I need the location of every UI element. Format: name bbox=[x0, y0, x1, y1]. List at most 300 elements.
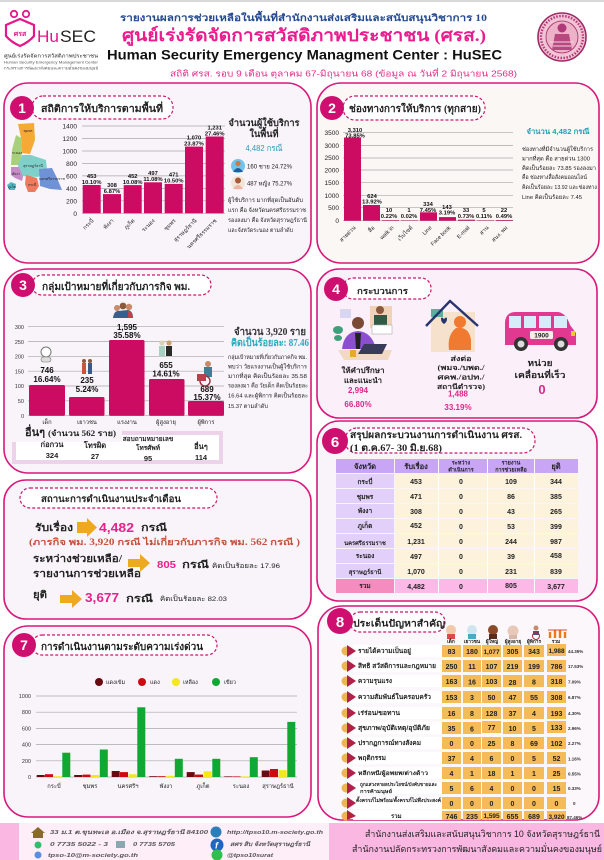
summary table: 0 bbox=[459, 539, 463, 546]
bar chart: target groups: 14.61% bbox=[152, 370, 180, 378]
grouped bar chart: ภูเก็ต bbox=[196, 781, 210, 790]
issue data grid: 0 bbox=[450, 801, 454, 808]
grouped bar chart: กระบี่ bbox=[47, 782, 61, 790]
target group summary text: 16.64 และผู้พิการ คิดเป็นร้อยละ bbox=[228, 390, 308, 400]
summary table: รายงาน bbox=[502, 460, 521, 466]
summary table: ดำเนินการ bbox=[448, 466, 474, 474]
in-progress cases: กรณี bbox=[182, 559, 210, 571]
total service users: ในพื้นที่ bbox=[250, 126, 278, 140]
received cases: 4,482 bbox=[99, 520, 134, 535]
issue data grid: 0 bbox=[490, 801, 494, 808]
issue data grid: 8 bbox=[511, 741, 515, 748]
bar chart: target groups: เด็ก bbox=[42, 417, 52, 426]
received cases bbox=[35, 518, 168, 537]
issue data grid: 4 bbox=[470, 756, 474, 763]
bar chart: cases by province: 471 bbox=[169, 172, 179, 178]
bar chart: channels: walk in bbox=[379, 225, 395, 242]
bar chart: target groups: เยาวชน bbox=[77, 419, 97, 426]
channel summary text: มากที่สุด คือ สายด่วน 1300 bbox=[522, 154, 590, 162]
others table: 27 bbox=[91, 452, 99, 461]
others table: ก่อกวน bbox=[41, 440, 64, 449]
bar chart: cases by province: 1200 bbox=[63, 136, 77, 143]
summary table: ระหว่าง bbox=[452, 460, 471, 466]
heading 6 bbox=[322, 428, 535, 454]
grouped bar chart: สุราษฎร์ธานี bbox=[262, 782, 294, 790]
issue labels: สิทธิ สวัสดิการและกฎหมาย bbox=[358, 662, 436, 670]
issue data grid: 343 bbox=[528, 649, 540, 656]
grouped bar chart: นครศรีฯ bbox=[117, 783, 139, 790]
right total: จำนวน 3,920 ราย bbox=[234, 326, 306, 338]
footer contact details: f bbox=[215, 840, 219, 850]
heading 6: (1 ต.ค.67- 30 มิ.ย.68) bbox=[350, 443, 442, 454]
closed cases: ยุติ bbox=[33, 589, 47, 601]
process: mobile unit: เคลื่อนที่เร็ว bbox=[514, 368, 566, 380]
bar chart: channels: 1500 bbox=[325, 180, 339, 187]
bar chart: channels: สาน bbox=[478, 224, 491, 237]
logo: HuSEC: กระทรวงการพัฒนาสังคมและความมั่นคงของมนุษย์ bbox=[4, 66, 98, 72]
channel summary text bbox=[522, 145, 597, 201]
bar chart: channels: Line bbox=[422, 225, 433, 237]
bar chart: target groups: 50 bbox=[18, 399, 24, 405]
map of provinces: สุราษฎร์ธานี bbox=[23, 163, 43, 169]
heading 7: การดำเนินงานตามระดับความเร่งด่วน bbox=[41, 641, 203, 653]
panel 1: service statistics by area bbox=[4, 83, 311, 263]
summary text: ผู้ใช้บริการ มากที่สุดเป็นอันดับ bbox=[228, 195, 303, 204]
issue percentages bbox=[567, 649, 583, 820]
heading 2: ช่องทางการให้บริการ (ทุกสาย) bbox=[349, 102, 481, 115]
bar chart: target groups: 746 bbox=[40, 366, 54, 375]
channel summary text: ช่องทางที่มีจำนวนผู้ใช้บริการ bbox=[522, 145, 593, 153]
summary table: ระนอง bbox=[356, 553, 374, 560]
issue data grid: 786 bbox=[551, 664, 562, 671]
issue data grid: 128 bbox=[486, 711, 497, 718]
bar chart: channels: 13.92% bbox=[362, 200, 382, 206]
bar chart: channels: 624 bbox=[367, 194, 378, 200]
illustration: mobile unit van bbox=[505, 312, 576, 351]
issue data grid: 25 bbox=[488, 741, 495, 748]
in-progress cases: คิดเป็นร้อยละ 17.96 bbox=[212, 561, 280, 570]
summary table: จังหวัด bbox=[354, 462, 376, 471]
summary table: 53 bbox=[507, 524, 515, 531]
issue data grid: 6 bbox=[490, 756, 494, 763]
footer contact details bbox=[31, 826, 324, 860]
issue data grid: 16 bbox=[468, 680, 476, 686]
issue data grid: 4 bbox=[450, 771, 454, 778]
bar chart: cases by province: 308 bbox=[107, 183, 118, 189]
bar chart: target groups: 1,595 bbox=[117, 323, 138, 332]
grouped bar chart: 400 bbox=[22, 742, 31, 748]
bar chart: target groups: ผู้สูงอายุ bbox=[156, 419, 176, 426]
summary table: 308 bbox=[410, 509, 422, 516]
bar chart: cases by province: 1000 bbox=[63, 148, 77, 156]
panel 7: urgency levels bbox=[4, 626, 311, 817]
footer organisation names bbox=[352, 828, 602, 855]
target group summary text: รองลงมา คือ วัยเด็ก คิดเป็นร้อยละ bbox=[228, 380, 308, 390]
bar chart: cases by province: 10.50% bbox=[164, 178, 184, 184]
icon and count: male: 160 ชาย 24.72% bbox=[247, 164, 293, 170]
footer contact details: สศร สิบ จังหวัดสุราษฎร์ธานี bbox=[230, 840, 311, 848]
heading 8 bbox=[327, 608, 445, 634]
bar chart: channels: 5 bbox=[482, 208, 486, 214]
closed cases bbox=[33, 589, 227, 608]
issue percentages: 87.46% bbox=[567, 815, 582, 820]
issue data grid: 163 bbox=[446, 679, 457, 686]
map of provinces bbox=[7, 123, 65, 192]
process: counselling: และแนะนำ bbox=[344, 376, 382, 385]
right total: คิดเป็นร้อยละ: 87.46 bbox=[231, 335, 309, 349]
logo: HuSEC: SEC bbox=[60, 27, 96, 46]
issue data grid: 5 bbox=[532, 726, 536, 733]
issue data grid: 0 bbox=[470, 801, 474, 808]
in-progress cases: รายงานการช่วยเหลือ bbox=[33, 568, 141, 580]
bar chart: channels: 0.11% bbox=[476, 214, 492, 220]
issue data grid: 35 bbox=[448, 726, 455, 733]
summary table: พังงา bbox=[358, 507, 372, 515]
heading 3: 3 bbox=[19, 277, 27, 293]
issue data grid: 107 bbox=[486, 664, 497, 671]
icon: person in wheelchair bbox=[197, 361, 212, 386]
summary table: 231 bbox=[505, 569, 517, 576]
arrow bullets bbox=[342, 645, 356, 820]
summary table: 0 bbox=[459, 569, 463, 576]
issue data grid: 235 bbox=[466, 814, 478, 821]
map of provinces: ภูเก็ต bbox=[8, 183, 17, 189]
bar chart: cases by province: 452 bbox=[128, 174, 138, 180]
map of provinces: พังงา bbox=[12, 172, 20, 176]
bar chart: channels: 1 bbox=[407, 208, 411, 214]
map of provinces: นครศรีธรรมราช bbox=[39, 176, 65, 181]
issue percentages: 17.53% bbox=[568, 664, 583, 669]
bar chart: channels: 3,310 bbox=[348, 128, 362, 134]
issue data grid: 199 bbox=[528, 664, 540, 671]
bar chart: target groups: 5.24% bbox=[76, 385, 98, 394]
bar chart: channels: 0.73% bbox=[458, 214, 474, 220]
footer contact details: tpso-10@m-society.go.th bbox=[48, 853, 139, 859]
issue data grid: 193 bbox=[551, 711, 562, 718]
bar chart: channels: 3000 bbox=[325, 143, 339, 150]
panel 8: key issues bbox=[318, 606, 599, 821]
issue data grid: 0 bbox=[511, 786, 515, 793]
heading 6: 6 bbox=[331, 434, 339, 451]
bar chart: target groups: 300 bbox=[15, 325, 24, 331]
others table: อื่นๆ bbox=[25, 424, 45, 439]
bar chart: target groups: แรงงาน bbox=[117, 419, 137, 426]
summary table: ชุมพร bbox=[357, 494, 374, 501]
icon: youth bbox=[82, 359, 92, 374]
status heading: สถานะการดำเนินงานประจำเดือน bbox=[41, 493, 182, 505]
process: referral: 33.19% bbox=[444, 403, 472, 412]
bar chart: channels: 33 bbox=[463, 208, 470, 214]
issue data grid: 5 bbox=[532, 756, 536, 763]
panel 4: process bbox=[317, 269, 597, 418]
bar chart: cases by province: 0 bbox=[73, 211, 77, 218]
icon: working-age people bbox=[113, 303, 133, 318]
issue data grid: 0 bbox=[532, 786, 536, 793]
total service users bbox=[228, 117, 300, 153]
in-progress cases bbox=[33, 553, 280, 580]
issue data grid: 6 bbox=[470, 786, 474, 793]
footer contact details: @tpso10surat bbox=[227, 853, 274, 859]
grouped bar chart: 800 bbox=[22, 710, 31, 716]
bar chart: channels: 2500 bbox=[325, 155, 339, 162]
others table: อื่นๆ bbox=[194, 440, 208, 451]
summary table: สุราษฎร์ธานี bbox=[349, 568, 382, 576]
heading 7 bbox=[12, 633, 217, 657]
footer organisation names: สำนักงานปลัดกระทรวงการพัฒนาสังคมและความมั่นคงของมนุษย์ bbox=[352, 842, 602, 855]
total channel cases: จำนวน 4,482 กรณี bbox=[526, 127, 590, 136]
summary table: 0 bbox=[459, 554, 463, 561]
heading 7: 7 bbox=[20, 637, 28, 653]
summary table: 0 bbox=[459, 494, 463, 501]
grouped bar chart: ระนอง bbox=[233, 783, 249, 790]
bar chart: channels bbox=[325, 128, 513, 248]
grouped bar chart: 0 bbox=[28, 775, 31, 781]
header title lines bbox=[107, 10, 517, 80]
issue labels: หลีกหนี/ผู้อพยพ/ต่างด้าว bbox=[358, 769, 428, 778]
bar chart: target groups: 0 bbox=[21, 414, 24, 420]
issue labels: ถูกแสวงหาผลประโยชน์/บังคับขายและ bbox=[360, 781, 437, 789]
bar chart: target groups: 35.58% bbox=[113, 331, 141, 340]
summary table: 86 bbox=[507, 494, 515, 501]
heading 4: 4 bbox=[332, 281, 340, 297]
footer bbox=[0, 823, 604, 860]
icon: child bbox=[41, 347, 51, 362]
bar chart: cases by province: 1,070 bbox=[187, 136, 201, 142]
total service users: 4,482 กรณี bbox=[246, 143, 283, 153]
channel summary text: คิดเป็นร้อยละ 13.92 และช่องทาง bbox=[522, 182, 597, 191]
bar chart: channels: 0.49% bbox=[496, 214, 512, 220]
summary table: 0 bbox=[459, 509, 463, 516]
process: referral: 1,488 bbox=[448, 390, 469, 398]
summary table: รับเรื่อง bbox=[404, 460, 428, 471]
issue data grid: 180 bbox=[466, 649, 478, 656]
logo: HuSEC: Human Security Emergency Management Center bbox=[4, 60, 99, 64]
bar chart: channels: 0.22% bbox=[381, 214, 397, 220]
issue data grid: 250 bbox=[446, 664, 457, 671]
issue labels: ปรากฏการณ์ทางสังคม bbox=[358, 739, 421, 747]
process: referral bbox=[437, 355, 486, 412]
bar chart: channels: 7.45% bbox=[420, 208, 436, 214]
summary table: 458 bbox=[550, 553, 562, 560]
issue data grid: 102 bbox=[551, 741, 562, 748]
closed cases: คิดเป็นร้อยละ 82.03 bbox=[160, 594, 227, 603]
summary table: 4,482 bbox=[407, 584, 425, 591]
summary table: 805 bbox=[505, 583, 517, 590]
issue data grid: 37 bbox=[509, 711, 516, 718]
channel summary text: คือ ช่องทางสื่อสังคมออนไลน์ bbox=[522, 173, 587, 181]
summary table: 43 bbox=[507, 509, 515, 516]
bar chart: cases by province: กระบี่ bbox=[81, 216, 96, 231]
bar chart: cases by province: 497 bbox=[148, 171, 158, 177]
others table: 95 bbox=[144, 454, 152, 463]
issue data grid: 308 bbox=[551, 695, 562, 702]
heading 3: กลุ่มเป้าหมายที่เกี่ยวกับภารกิจ พม. bbox=[42, 279, 190, 293]
legend: แดง bbox=[150, 680, 160, 686]
issue percentages: 0.33% bbox=[568, 786, 581, 791]
logo: HuSEC bbox=[4, 11, 99, 72]
target group summary text: กลุ่มเป้าหมายที่เกี่ยวกับภาคกิจ พม. bbox=[228, 353, 307, 361]
target group summary text: มากที่สุด คิดเป็นร้อยละ 35.58 bbox=[228, 371, 307, 380]
issue data grid: 25 bbox=[553, 771, 560, 778]
issue data grid: 3 bbox=[470, 695, 474, 702]
bar chart: cases by province: 27.46% bbox=[205, 132, 225, 138]
issue data grid: 11 bbox=[468, 664, 476, 671]
total service users: จำนวนผู้ใช้บริการ bbox=[228, 117, 300, 130]
bar chart: channels: 73.85% bbox=[345, 134, 365, 140]
issue labels: พฤติกรรม bbox=[358, 754, 386, 762]
in-progress cases: 805 bbox=[157, 560, 176, 571]
process: mobile unit: หน่วย bbox=[528, 358, 553, 368]
issue data grid: 1 bbox=[532, 771, 536, 778]
issue data grid: 5 bbox=[450, 786, 454, 793]
issue data grid: 689 bbox=[528, 814, 540, 821]
logo: HuSEC: Hu bbox=[37, 27, 59, 46]
bar chart: cases by province: 1400 bbox=[63, 124, 77, 130]
legend bbox=[95, 678, 236, 686]
issue data grid bbox=[442, 644, 566, 821]
issue data grid: 4 bbox=[490, 786, 494, 793]
issue data grid: 83 bbox=[448, 649, 455, 656]
bar chart: cases by province: ระนอง bbox=[141, 218, 157, 233]
heading 3 bbox=[11, 273, 211, 297]
bar chart: target groups: 15.37% bbox=[193, 393, 221, 402]
column headers: ผู้ใหญ่ bbox=[486, 638, 498, 646]
heading 8: 8 bbox=[336, 614, 344, 631]
summary table: 39 bbox=[507, 554, 515, 561]
header title lines: สถิติ ศรส. รอบ 9 เดือน ตุลาคม 67-มิถุนายน 68 (ข้อมูล ณ วันที่ 2 มิถุนายน 2568) bbox=[170, 68, 517, 80]
issue data grid: 37 bbox=[448, 756, 455, 763]
received cases: รับเรื่อง bbox=[35, 520, 73, 534]
bar chart: cases by province: ชุมพร bbox=[163, 217, 177, 232]
column headers: รวม bbox=[552, 639, 560, 645]
map of provinces: กระบี่ bbox=[28, 182, 37, 187]
bar chart: channels: 3500 bbox=[325, 130, 339, 137]
issue labels: รายได้ความเป็นอยู่ bbox=[358, 646, 411, 656]
illustration: counsellor with laptop bbox=[333, 306, 392, 360]
legend: แดงเข้ม bbox=[106, 679, 125, 686]
issue labels: การค้ามนุษย์ bbox=[360, 788, 392, 795]
header title lines: Human Security Emergency Managment Center : HuSEC bbox=[107, 48, 502, 62]
column headers bbox=[447, 637, 560, 646]
legend: เขียว bbox=[224, 679, 236, 686]
issue data grid: 6 bbox=[470, 726, 474, 734]
issue data grid: 1,988 bbox=[548, 648, 565, 655]
process: counselling: 2,994 bbox=[348, 386, 369, 395]
received note: (ภารกิจ พม. 3,920 กรณี ไม่เกี่ยวกับภารกิจ พม. 562 กรณี ) bbox=[29, 535, 300, 547]
bar chart: channels: 500 bbox=[328, 205, 339, 212]
column headers: เด็ก bbox=[447, 637, 455, 645]
icon and count: female: 487 หญิง 75.27% bbox=[247, 180, 293, 188]
heading 8: ประเด็นปัญหาสำคัญ bbox=[353, 616, 445, 630]
bar chart: cases by province: สุราษฎร์ธานี bbox=[172, 217, 199, 244]
issue data grid: 746 bbox=[446, 814, 457, 821]
summary table: 471 bbox=[410, 494, 422, 501]
bar chart: channels: 10 bbox=[386, 208, 392, 214]
issue data grid: 1,595 bbox=[484, 813, 500, 820]
heading 4: กระบวนการ bbox=[357, 286, 408, 296]
summary table: 0 bbox=[459, 584, 463, 591]
summary table: การช่วยเหลือ bbox=[495, 466, 527, 474]
others table: 114 bbox=[195, 453, 208, 462]
header title lines: ศูนย์เร่งรัดจัดการสวัสดิภาพประชาชน (ศรส.) bbox=[122, 25, 486, 47]
summary text: และจังหวัดระนอง ตามลำดับ bbox=[228, 226, 293, 234]
issue data grid: 8 bbox=[470, 711, 474, 718]
bar chart: channels: สายด่วน bbox=[338, 224, 358, 244]
process: referral: ศคพ./อปท./ bbox=[438, 374, 486, 382]
bar chart: channels: 0.02% bbox=[401, 214, 417, 220]
column icons bbox=[446, 625, 567, 640]
bar chart: channels: 2000 bbox=[325, 168, 339, 174]
summary table: 109 bbox=[505, 479, 517, 486]
issue labels: ความรุนแรง bbox=[358, 678, 392, 685]
bar chart: target groups: 235 bbox=[80, 376, 94, 385]
process: referral: ส่งต่อ bbox=[450, 355, 472, 363]
issue data grid: 50 bbox=[488, 695, 495, 702]
closed cases: กรณี bbox=[126, 593, 154, 605]
bar chart: target groups: ผู้พิการ bbox=[197, 419, 215, 426]
summary table: 1,231 bbox=[407, 539, 425, 546]
heading 1: 1 bbox=[18, 100, 26, 116]
logo: HuSEC: ศูนย์เร่งรัดจัดการสวัสดิภาพประชาชน bbox=[4, 52, 99, 60]
bar chart: channels: สนง. พม bbox=[490, 224, 510, 244]
icon and count: male bbox=[231, 159, 293, 173]
bar chart: channels: 0 bbox=[335, 218, 339, 225]
bar chart: cases by province: 200 bbox=[66, 198, 77, 206]
issue percentages: 2.27% bbox=[568, 741, 581, 746]
issue data grid: 3,920 bbox=[548, 814, 565, 821]
grouped bar chart: 600 bbox=[22, 726, 31, 732]
bar chart: channels: 3.19% bbox=[439, 210, 455, 216]
grouped bar chart: พังงา bbox=[160, 782, 172, 790]
summary table: 453 bbox=[410, 479, 422, 486]
issue percentages: 1.16% bbox=[568, 756, 581, 762]
summary text bbox=[228, 195, 307, 234]
footer contact details: 0 7735 5705 bbox=[133, 842, 176, 848]
heading 1 bbox=[10, 96, 173, 120]
footer contact details: http://tpso10.m-society.go.th bbox=[227, 830, 324, 836]
channel summary text: Line คิดเป็นร้อยละ 7.45 bbox=[522, 192, 582, 201]
issue data grid: 0 bbox=[450, 741, 454, 748]
summary table: 0 bbox=[459, 479, 463, 486]
others table: สอบถามหมายเลข bbox=[123, 436, 173, 443]
issue percentages: 4.30% bbox=[568, 711, 581, 716]
bar chart: cases by province: 10.10% bbox=[82, 180, 102, 186]
bar chart: target groups: 100 bbox=[15, 384, 24, 390]
bar chart: channels: เว็บไซต์ bbox=[396, 223, 415, 243]
issue percentages: 0.55% bbox=[568, 772, 581, 776]
panel 6: process summary table bbox=[317, 421, 597, 601]
summary table bbox=[336, 459, 578, 593]
issue data grid: 318 bbox=[551, 679, 562, 686]
panel 2: service channels bbox=[317, 83, 599, 263]
bar chart: channels: E-mail bbox=[456, 225, 471, 240]
status heading bbox=[20, 488, 217, 508]
issue labels bbox=[356, 646, 442, 820]
target group summary text: 15.37 ตามลำดับ bbox=[228, 402, 268, 410]
summary table: 344 bbox=[550, 479, 562, 486]
issue data grid: 8 bbox=[532, 680, 536, 686]
grouped bar chart: 1000 bbox=[19, 694, 31, 700]
in-progress cases: ระหว่างช่วยเหลือ/ bbox=[33, 553, 122, 565]
bar chart: cases by province: 6.87% bbox=[104, 189, 120, 195]
bar chart: cases by province: 10.08% bbox=[123, 180, 143, 186]
map of provinces: ระนอง bbox=[12, 151, 22, 155]
footer organisation names: สำนักงานส่งเสริมและสนับสนุนวิชาการ 10 จังหวัดสุราษฎร์ธานี bbox=[365, 828, 600, 840]
summary table: 0 bbox=[459, 524, 463, 531]
bar chart: target groups: 150 bbox=[15, 370, 24, 376]
issue data grid: 219 bbox=[507, 664, 518, 671]
process: counselling: 66.80% bbox=[344, 400, 372, 409]
